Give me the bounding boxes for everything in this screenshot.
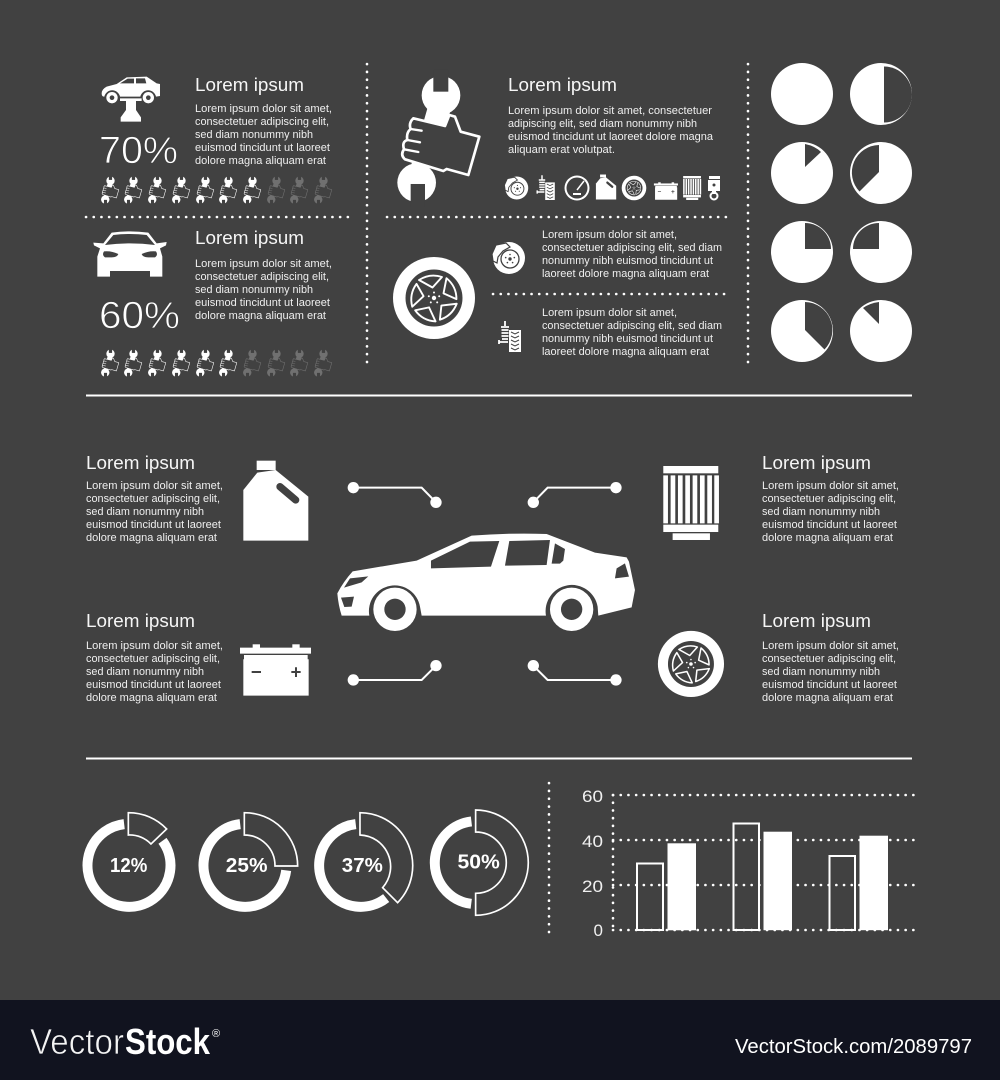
panel: top middle service bbox=[393, 70, 722, 358]
axis labels: 60 bbox=[582, 787, 603, 806]
body text: consectetuer adipiscing elit, sed diam bbox=[542, 242, 722, 254]
body text: laoreet dolore magna aliquam erat bbox=[542, 346, 709, 358]
text block: filter: dolore magna aliquam erat bbox=[762, 532, 893, 544]
icon row: 7 of 10 wrenches bbox=[101, 175, 332, 205]
body text: nonummy nibh euismod tincidunt ut bbox=[542, 255, 713, 267]
text block: battery: Lorem ipsum bbox=[86, 610, 195, 631]
stat: 70%: 70% bbox=[99, 130, 178, 172]
text block: battery bbox=[86, 610, 223, 704]
VectorStock logo: Stock bbox=[125, 1021, 211, 1062]
text block: oil: sed diam nonummy nibh bbox=[86, 506, 204, 518]
text block: filter: Lorem ipsum bbox=[762, 452, 871, 473]
icon row: 6 of 10 wrenches bbox=[101, 348, 332, 378]
body text: laoreet dolore magna aliquam erat bbox=[542, 268, 709, 280]
body text: euismod tincidunt ut laoreet dolore magna bbox=[508, 131, 714, 143]
pie: 87 percent left bbox=[850, 300, 912, 362]
pie: 87 percent bbox=[771, 142, 833, 204]
pie: 75 percent bbox=[771, 221, 833, 283]
connector: bottom right bbox=[528, 660, 622, 686]
VectorStock logo: ® bbox=[212, 1028, 220, 1040]
heading: Lorem ipsum bbox=[195, 74, 304, 95]
icon: oil jug bbox=[243, 461, 308, 541]
text block: filter bbox=[762, 452, 899, 544]
body text: adipiscing elit, sed diam nonummy nibh bbox=[508, 118, 697, 130]
text block: oil: dolore magna aliquam erat bbox=[86, 532, 217, 544]
body text: dolore magna aliquam erat bbox=[195, 155, 326, 167]
text block: oil bbox=[86, 452, 223, 544]
body text: consectetuer adipiscing elit, bbox=[195, 116, 329, 128]
donut: 12%: 12% bbox=[110, 855, 148, 877]
VectorStock logo: Vector bbox=[30, 1021, 124, 1062]
connector: top right bbox=[528, 482, 622, 508]
footer band bbox=[0, 1000, 1000, 1080]
text block: battery: consectetuer adipiscing elit, bbox=[86, 653, 220, 665]
body text bbox=[195, 103, 332, 167]
text block: filter: sed diam nonummy nibh bbox=[762, 506, 880, 518]
icon: suspension bbox=[499, 321, 521, 352]
axis labels: 0 bbox=[594, 921, 603, 940]
text block: oil: euismod tincidunt ut laoreet bbox=[86, 519, 221, 531]
axis labels bbox=[582, 787, 603, 940]
text block: oil: consectetuer adipiscing elit, bbox=[86, 493, 220, 505]
text block: filter: euismod tincidunt ut laoreet bbox=[762, 519, 897, 531]
body text: consectetuer adipiscing elit, bbox=[195, 271, 329, 283]
donut: 25%: 25% bbox=[226, 855, 268, 877]
text block: filter: consectetuer adipiscing elit, bbox=[762, 493, 896, 505]
grid bbox=[613, 795, 918, 930]
donut: 37% bbox=[302, 807, 419, 924]
icon: battery bbox=[240, 644, 311, 696]
icon: car on lift bbox=[102, 77, 160, 122]
body text: euismod tincidunt ut laoreet bbox=[195, 142, 330, 154]
body text: consectetuer adipiscing elit, sed diam bbox=[542, 320, 722, 332]
body text: sed diam nonummy nibh bbox=[195, 129, 313, 141]
VectorStock logo bbox=[30, 1021, 220, 1062]
text block: tyre: Lorem ipsum bbox=[762, 610, 871, 631]
icon row: car parts bbox=[504, 175, 720, 200]
text block: oil: Lorem ipsum dolor sit amet, bbox=[86, 480, 223, 492]
donut: 50% bbox=[430, 810, 528, 915]
icon: car front bbox=[93, 231, 167, 277]
icon: air filter bbox=[663, 466, 718, 540]
donut: 37%: 37% bbox=[342, 855, 383, 877]
icon: sedan car bbox=[337, 534, 635, 631]
text block: tyre: consectetuer adipiscing elit, bbox=[762, 653, 896, 665]
text block: tyre bbox=[762, 610, 899, 704]
axis labels: 20 bbox=[582, 877, 603, 896]
axis labels: 40 bbox=[582, 832, 603, 851]
body text bbox=[508, 105, 714, 156]
text block: tyre: Lorem ipsum dolor sit amet, bbox=[762, 640, 899, 652]
text block: filter: Lorem ipsum dolor sit amet, bbox=[762, 480, 899, 492]
donut: 50%: 50% bbox=[457, 852, 500, 874]
icon: hand holding wrench bbox=[397, 70, 479, 207]
body text: aliquam erat volutpat. bbox=[508, 144, 615, 156]
body text: Lorem ipsum dolor sit amet, bbox=[195, 103, 332, 115]
body text: sed diam nonummy nibh bbox=[195, 284, 313, 296]
text block: battery: Lorem ipsum dolor sit amet, bbox=[86, 640, 223, 652]
icon: brake disc bbox=[492, 242, 525, 274]
text block: tyre: sed diam nonummy nibh bbox=[762, 666, 880, 678]
stat: 60%: 60% bbox=[99, 295, 180, 337]
body text: dolore magna aliquam erat bbox=[195, 310, 326, 322]
panel: pie charts bbox=[771, 63, 912, 362]
text block: battery: euismod tincidunt ut laoreet bbox=[86, 679, 221, 691]
bars: group 2 bbox=[734, 824, 792, 930]
text block: oil: Lorem ipsum bbox=[86, 452, 195, 473]
diagram: car and parts bbox=[240, 461, 724, 697]
body text: Lorem ipsum dolor sit amet, bbox=[542, 307, 677, 319]
donut: 12% bbox=[71, 807, 187, 923]
footer image id: VectorStock.com/2089797 bbox=[735, 1036, 972, 1058]
icon: wheel bbox=[393, 257, 475, 339]
text block: tyre: dolore magna aliquam erat bbox=[762, 692, 893, 704]
connector: top left bbox=[348, 482, 442, 508]
heading: Lorem ipsum bbox=[195, 227, 304, 248]
body text: Lorem ipsum dolor sit amet, bbox=[195, 258, 332, 270]
heading: Lorem ipsum bbox=[508, 74, 617, 95]
pie: full bbox=[771, 63, 833, 125]
body text bbox=[195, 258, 332, 322]
pie: 62 percent right bbox=[771, 300, 833, 362]
body text bbox=[542, 307, 722, 358]
text block: tyre: euismod tincidunt ut laoreet bbox=[762, 679, 897, 691]
body text: Lorem ipsum dolor sit amet, bbox=[542, 229, 677, 241]
pie: half bbox=[850, 63, 912, 125]
donut: 25% bbox=[199, 813, 298, 912]
text block: battery: sed diam nonummy nibh bbox=[86, 666, 204, 678]
text block: battery: dolore magna aliquam erat bbox=[86, 692, 217, 704]
body text: euismod tincidunt ut laoreet bbox=[195, 297, 330, 309]
panel: top left stats bbox=[93, 74, 332, 378]
connector: bottom left bbox=[348, 660, 442, 686]
panel: donut charts bbox=[71, 807, 528, 924]
dividers bbox=[86, 64, 912, 937]
pie: 62 percent bbox=[850, 142, 912, 204]
bars: group 3 bbox=[830, 836, 888, 930]
pie: 75 percent mirrored bbox=[850, 221, 912, 283]
body text: nonummy nibh euismod tincidunt ut bbox=[542, 333, 713, 345]
body text: Lorem ipsum dolor sit amet, consectetuer bbox=[508, 105, 712, 117]
bars: group 1 bbox=[637, 843, 696, 930]
panel: middle car parts bbox=[86, 452, 899, 704]
bar chart bbox=[582, 787, 918, 940]
body text bbox=[542, 229, 722, 280]
icon: tyre bbox=[658, 631, 724, 697]
